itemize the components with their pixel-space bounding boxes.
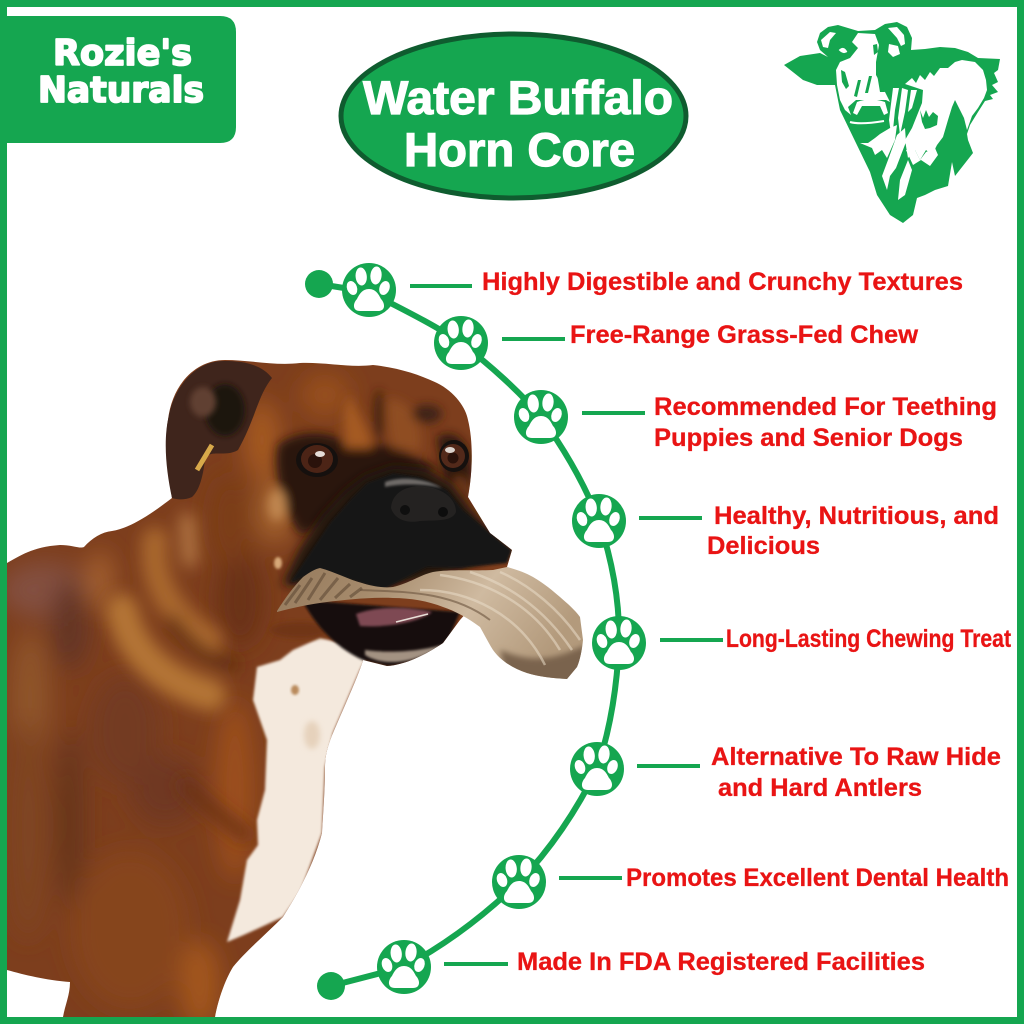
logo badge	[7, 16, 236, 143]
benefit connectors and labels	[410, 268, 1012, 976]
icon: paw node 8	[377, 940, 431, 994]
black muzzle mask	[290, 473, 512, 590]
benefit 3: Recommended For Teething	[654, 393, 997, 421]
title badge	[341, 34, 686, 198]
eye: dog right	[439, 440, 469, 472]
timeline end dot	[317, 972, 345, 1000]
benefit 4	[639, 502, 999, 560]
dog body and head	[7, 360, 512, 1017]
timeline start dot	[305, 270, 333, 298]
icon: paw node 5	[592, 616, 646, 670]
benefit 3: Puppies and Senior Dogs	[654, 424, 963, 452]
logo text: Rozie's	[53, 33, 192, 74]
icon: paw node 2	[434, 316, 488, 370]
face shading	[268, 389, 472, 535]
benefit 6	[637, 743, 1001, 802]
paw nodes	[342, 263, 646, 994]
icon: paw node 7	[492, 855, 546, 909]
photo: boxer dog with horn chew	[0, 340, 590, 1024]
icon: water buffalo head	[784, 22, 1000, 223]
black muzzle halo	[282, 465, 505, 590]
icon: paw node 4	[572, 494, 626, 548]
benefit 7: Promotes Excellent Dental Health	[626, 864, 1009, 892]
title text: Horn Core	[404, 123, 635, 176]
eye: dog left	[296, 443, 338, 477]
icon: paw node 3	[514, 390, 568, 444]
horn chew	[277, 567, 583, 679]
benefit 6: Alternative To Raw Hide	[711, 743, 1001, 771]
benefit 6: and Hard Antlers	[718, 774, 922, 802]
white chest	[227, 638, 370, 942]
logo text	[38, 33, 204, 111]
icon: paw node 1	[342, 263, 396, 317]
dog nose	[385, 479, 456, 522]
title text	[363, 71, 673, 176]
lower jaw	[302, 600, 460, 666]
benefit 4: Healthy, Nutritious, and	[714, 502, 999, 530]
benefit 3	[582, 393, 997, 452]
logo text: Naturals	[38, 70, 204, 111]
title text: Water Buffalo	[363, 71, 673, 124]
benefit 2: Free-Range Grass-Fed Chew	[570, 321, 919, 349]
benefit 1: Highly Digestible and Crunchy Textures	[482, 268, 963, 296]
benefit 8: Made In FDA Registered Facilities	[517, 948, 925, 976]
timeline curve	[319, 284, 619, 986]
neck folds	[122, 520, 245, 835]
icon: paw node 6	[570, 742, 624, 796]
ear	[166, 361, 272, 499]
benefit 4: Delicious	[707, 532, 820, 560]
